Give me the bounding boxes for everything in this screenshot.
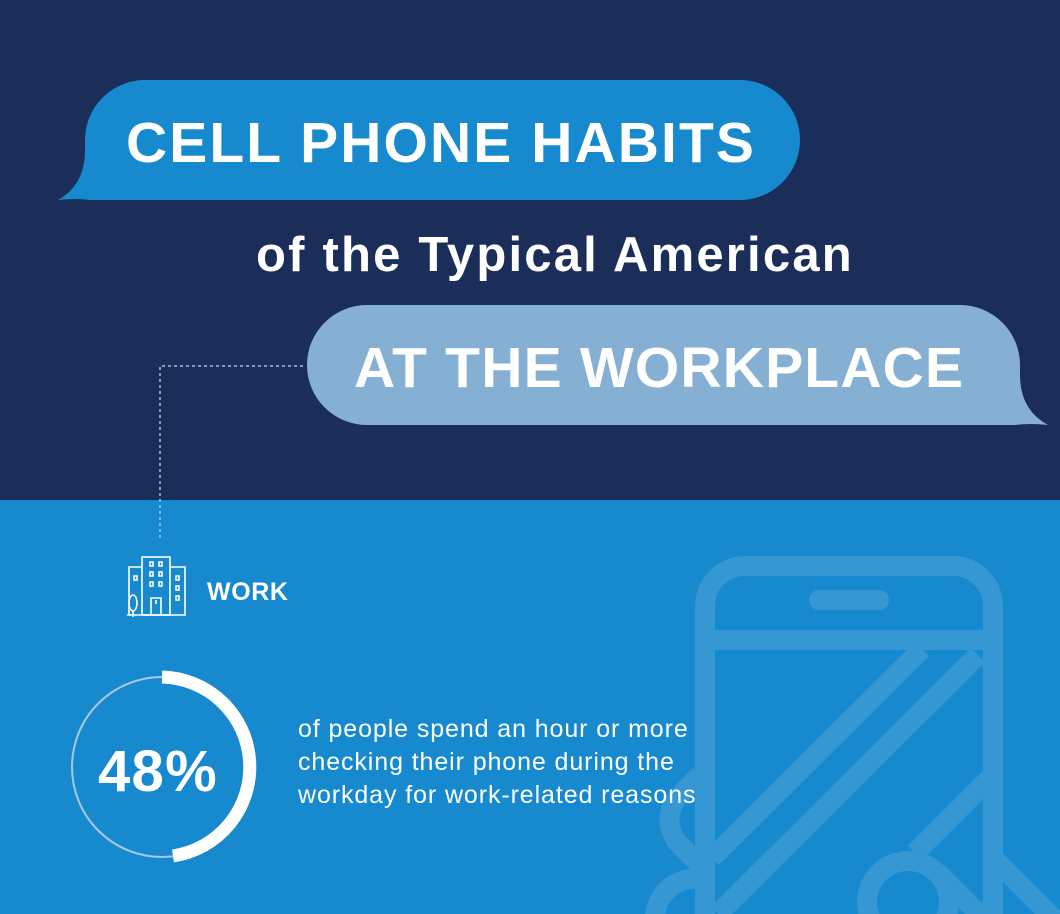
stat description [298,715,696,809]
top navy panel [0,0,1060,500]
connector dotted line [159,365,303,538]
title bubble: cell phone habits [58,80,800,200]
bottom blue panel [0,500,1060,914]
stat description: checking their phone during the [298,748,675,776]
stat description: of people spend an hour or more [298,715,689,743]
donut chart 48% [71,670,256,862]
title bubble: cell phone habits: CELL PHONE HABITS [126,111,756,175]
donut chart 48%: 48% [98,739,218,804]
subtitle: of the Typical American [256,228,854,282]
title bubble: at the workplace: AT THE WORKPLACE [354,336,964,400]
icon: office building [127,556,186,617]
title bubble: at the workplace [307,305,1048,425]
stat description: workday for work-related reasons [298,781,696,809]
label: work: WORK [207,578,289,606]
